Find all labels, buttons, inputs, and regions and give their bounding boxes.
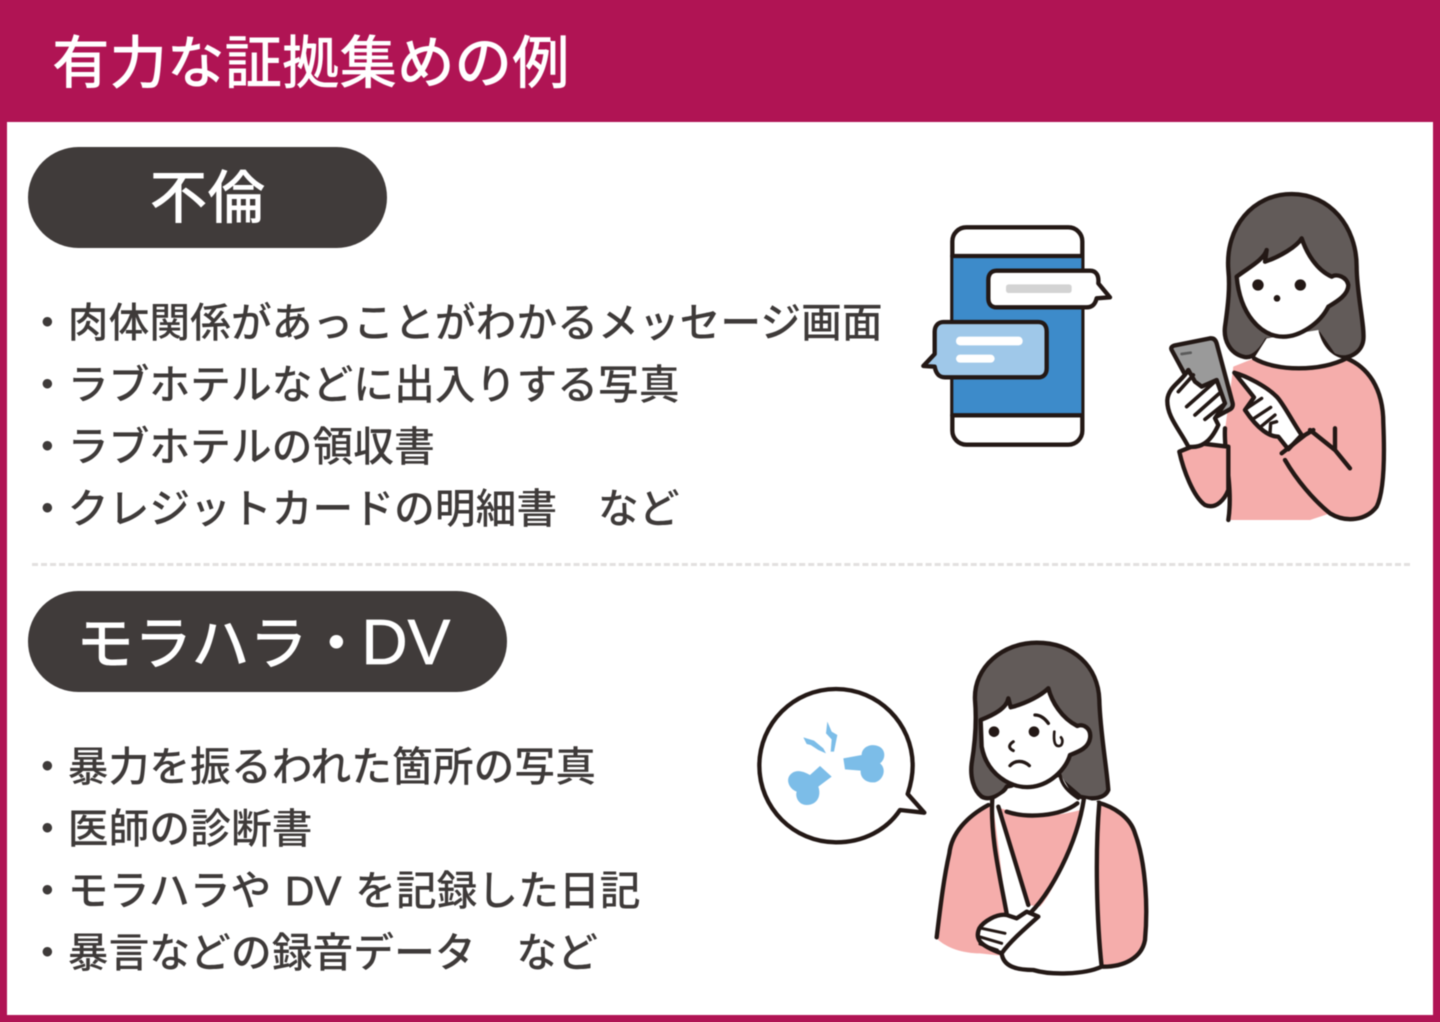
- icon: woman with arm sling: [937, 643, 1146, 973]
- list: affair evidence: ・ラブホテルの領収書: [27, 424, 435, 470]
- list: harassment and DV evidence: ・暴言などの録音データ など: [27, 930, 598, 976]
- list: affair evidence: ・肉体関係があっことがわかるメッセージ画面: [27, 300, 883, 346]
- list: affair evidence: [27, 300, 883, 532]
- list: affair evidence: ・クレジットカードの明細書 など: [27, 486, 680, 532]
- list: harassment and DV evidence: ・暴力を振るわれた箇所の写真: [27, 744, 596, 790]
- list: harassment and DV evidence: ・モラハラや DV を記録した日記: [27, 868, 641, 914]
- heading: 不倫: 不倫: [149, 166, 266, 231]
- heading: モラハラ・DV: モラハラ・DV: [76, 606, 450, 678]
- icon: woman using phone: [1167, 194, 1384, 520]
- divider: [32, 563, 1410, 566]
- heading: 不倫: [28, 147, 387, 248]
- list: harassment and DV evidence: ・医師の診断書: [27, 806, 313, 852]
- heading: モラハラ・DV: [28, 591, 507, 692]
- list: affair evidence: ・ラブホテルなどに出入りする写真: [27, 362, 680, 408]
- icon: speech bubble with bones: [759, 689, 924, 842]
- icon: smartphone with messages: [923, 227, 1110, 445]
- list: harassment and DV evidence: [27, 744, 641, 976]
- title: 有力な証拠集めの例: [52, 32, 570, 96]
